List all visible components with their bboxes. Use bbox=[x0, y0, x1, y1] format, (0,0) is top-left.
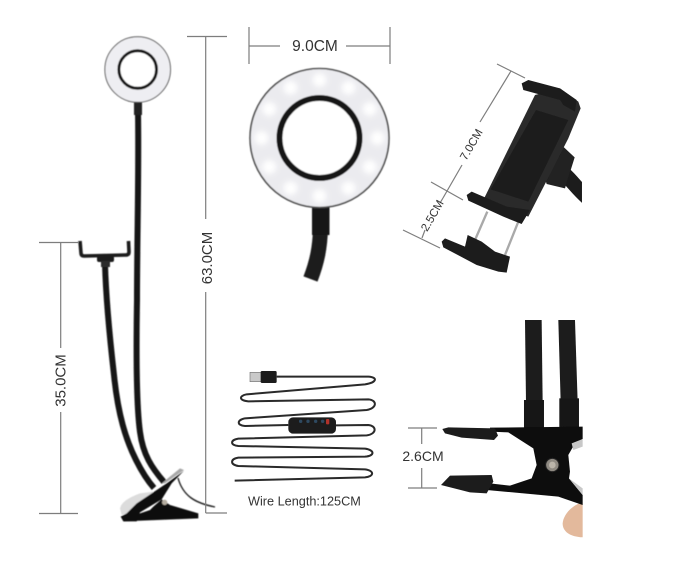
icon: LED dots bbox=[254, 73, 384, 203]
chrome rods bbox=[475, 212, 518, 255]
dimension: 9.0CM: 9.0CM bbox=[292, 38, 338, 55]
dimension: 35.0CM: 35.0CM bbox=[52, 354, 70, 407]
icon: small clamp bbox=[120, 468, 198, 521]
caption: wire length: Wire Length:125CM bbox=[248, 494, 361, 508]
middle jaw bbox=[467, 192, 530, 224]
bottom pad bbox=[441, 475, 493, 493]
gooseneck: large neck bbox=[310, 228, 320, 279]
panel: clamp closeup bbox=[441, 320, 583, 537]
spring highlight bbox=[572, 439, 583, 450]
icon: ring body bbox=[250, 68, 389, 208]
dimension: 2.5CM bbox=[403, 198, 447, 248]
dimension: 2.6CM bbox=[402, 428, 444, 488]
photo: thumb bbox=[563, 502, 583, 537]
icon: small phone holder bbox=[80, 241, 129, 267]
panel: phone holder closeup bbox=[442, 80, 590, 273]
gooseneck: phone arm bbox=[105, 264, 154, 488]
panel: full lamp product bbox=[80, 37, 215, 521]
clamp body bbox=[487, 427, 583, 505]
dimension: 2.5CM: 2.5CM bbox=[419, 198, 447, 234]
dimension: 9.0CM bbox=[249, 27, 390, 64]
gooseneck: lamp arm bbox=[137, 112, 164, 482]
dimension: 63.0CM: 63.0CM bbox=[199, 232, 216, 284]
panel: large ring light bbox=[250, 68, 389, 279]
cable loops bbox=[232, 377, 375, 481]
panel: USB cable bbox=[232, 371, 375, 481]
holder back plate bbox=[483, 88, 581, 217]
dimension: 7.0CM: 7.0CM bbox=[458, 127, 486, 163]
inline controller bbox=[288, 417, 336, 434]
dimension: 35.0CM bbox=[39, 242, 78, 514]
dimension: 63.0CM bbox=[187, 36, 227, 513]
gooseneck: holder arm bbox=[566, 170, 582, 203]
top jaw bbox=[522, 80, 577, 112]
power cable bbox=[178, 478, 215, 507]
icon: inner black ring bbox=[280, 98, 360, 178]
bottom jaw bbox=[442, 235, 510, 273]
goosenecks bbox=[524, 320, 579, 428]
pivot bolt bbox=[546, 458, 559, 472]
dimension: 2.6CM: 2.6CM bbox=[402, 448, 444, 464]
dimension: 7.0CM bbox=[431, 64, 525, 200]
top pad bbox=[442, 427, 498, 440]
infographic: ring light dimensions bbox=[39, 27, 583, 538]
mount knob bbox=[546, 147, 575, 188]
USB plug bbox=[250, 371, 277, 383]
icon: small ring light bbox=[105, 37, 170, 115]
